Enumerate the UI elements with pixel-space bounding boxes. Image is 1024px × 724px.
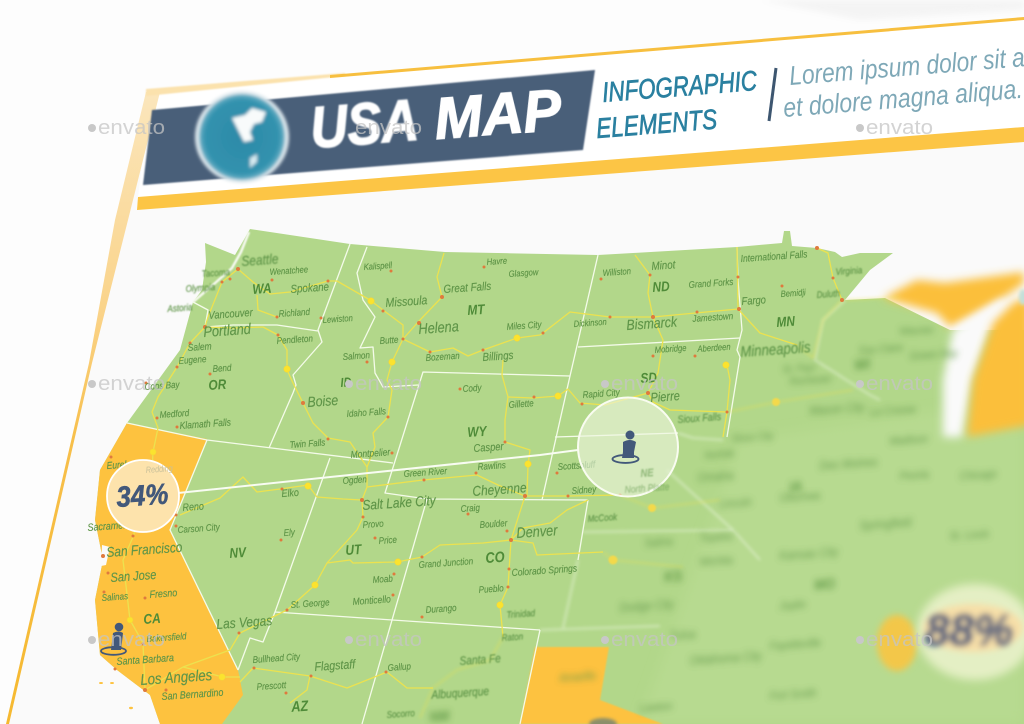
- city labels sharp: Pendleton: [276, 333, 313, 346]
- state abbreviations: ND: [652, 278, 671, 295]
- city labels sharp: Bemidji: [780, 287, 807, 299]
- city labels sharp: Craig: [460, 502, 480, 514]
- city labels sharp: Jamestown: [691, 310, 734, 324]
- city labels sharp: Vancouver: [208, 307, 254, 322]
- header title panel: [143, 70, 595, 185]
- land: green states: [95, 229, 1024, 724]
- city labels sharp: Sidney: [571, 484, 597, 496]
- city labels sharp: Ogden: [342, 474, 367, 486]
- city labels slightly blurred: Raton: [501, 631, 524, 643]
- city labels sharp: Great Falls: [443, 280, 492, 296]
- city labels sharp: Fresno: [149, 587, 178, 601]
- header band background: [138, 18, 1024, 198]
- city labels far blur: Lawton: [639, 700, 673, 715]
- city labels sharp: San Francisco: [106, 539, 183, 560]
- city labels far blur: Kansas City: [779, 544, 840, 563]
- city labels sharp: Fargo: [741, 295, 767, 308]
- watermarks: envato: [98, 629, 165, 651]
- city labels sharp: Gallup: [387, 661, 411, 673]
- city labels slightly blurred: Trinidad: [506, 607, 536, 620]
- city labels slightly blurred: Minneapolis: [740, 339, 811, 361]
- lens inner labels: [624, 467, 670, 495]
- header description: [782, 42, 1024, 123]
- lake michigan: [943, 300, 1013, 437]
- state abbreviations blurred: KS: [664, 567, 683, 585]
- upper right shade: [760, 0, 1024, 20]
- page left border: [6, 92, 160, 724]
- city labels far blur: Omaha: [697, 468, 734, 485]
- city labels sharp: Flagstaff: [314, 657, 357, 674]
- lake huron: [1019, 289, 1024, 305]
- city labels sharp: Minot: [651, 259, 677, 273]
- city labels far blur: Amarillo: [558, 670, 597, 685]
- city labels sharp: Las Vegas: [216, 612, 273, 632]
- pointer line: 34% to person marker: [178, 450, 578, 493]
- state: blurred south blob: [589, 718, 617, 724]
- watermarks: envato: [866, 629, 933, 651]
- state abbreviations: [143, 278, 796, 715]
- state abbreviations blurred: [429, 355, 872, 724]
- city labels sharp: Montpelier: [350, 447, 391, 460]
- state abbreviations: WA: [252, 280, 272, 297]
- state abbreviations: NV: [229, 544, 248, 561]
- city labels sharp: San Bernardino: [161, 687, 224, 703]
- city labels sharp: Eugene: [178, 353, 207, 366]
- city labels far blur: Springfield: [859, 514, 913, 533]
- city labels sharp: Butte: [379, 334, 399, 346]
- city labels sharp: Monticello: [352, 594, 391, 607]
- state abbreviations: OR: [208, 376, 227, 393]
- city labels sharp: Reno: [182, 501, 205, 514]
- city labels sharp: Mobridge: [654, 342, 687, 355]
- callout: person circle: [578, 398, 678, 496]
- city labels sharp: Casper: [473, 441, 505, 455]
- city labels sharp: Sacramento: [87, 519, 136, 534]
- city labels slightly blurred: Virginia: [835, 265, 863, 277]
- city labels sharp: Carson City: [177, 521, 221, 535]
- icon: globe: [195, 91, 289, 183]
- state: Michigan upper: [883, 272, 1024, 327]
- city labels sharp: Bakersfield: [146, 631, 188, 644]
- city labels sharp: Billings: [482, 349, 514, 364]
- city labels sharp: Twin Falls: [289, 437, 326, 450]
- watermarks: envato: [98, 373, 165, 395]
- city labels far blur: Dodge City: [619, 596, 675, 615]
- city labels slightly blurred: Santa Fe: [459, 652, 501, 668]
- california islands: [99, 682, 133, 709]
- city labels sharp: Grand Forks: [688, 276, 734, 290]
- subtitle: infographic elements: INFOGRAPHIC: [601, 65, 759, 108]
- city labels far blur: Joplin: [778, 598, 806, 613]
- city labels sharp: Bullhead City: [252, 651, 301, 665]
- state: California: [95, 423, 243, 724]
- state borders: [127, 244, 742, 724]
- city labels sharp: San Jose: [110, 567, 157, 585]
- title: USA MAP: [308, 77, 564, 161]
- city labels sharp: [87, 249, 808, 703]
- city labels slightly blurred: Tacoma: [201, 266, 230, 279]
- callout: 88 percent blurred: [923, 604, 1023, 655]
- state: Arkansas blurred: [877, 615, 917, 671]
- title: USA MAP: MAP: [432, 77, 564, 152]
- city labels sharp: Salinas: [101, 591, 129, 603]
- city labels sharp: Medford: [159, 407, 190, 420]
- watermarks: [88, 117, 933, 651]
- city markers: [101, 246, 844, 694]
- city labels slightly blurred: Albuquerque: [430, 685, 489, 702]
- lens inner labels: North Platte: [624, 481, 670, 495]
- state abbreviations: WY: [467, 423, 488, 440]
- city labels sharp: Green River: [403, 465, 448, 479]
- city labels far blur: Green Bay: [909, 347, 960, 363]
- state borders blurred east: [540, 300, 880, 630]
- city labels far blur: St. Louis: [949, 528, 990, 543]
- city labels slightly blurred: [166, 251, 863, 720]
- city labels sharp: Cheyenne: [472, 479, 527, 499]
- callout value: 34%: [115, 478, 169, 514]
- city labels far blur: Madison: [889, 433, 928, 448]
- city labels far blur: Tulsa: [669, 626, 696, 643]
- city labels sharp: Ely: [283, 527, 296, 538]
- city labels far blur: Wichita: [699, 554, 733, 569]
- watermarks: envato: [355, 117, 422, 139]
- highway shields: [127, 298, 729, 680]
- city labels slightly blurred: Olympia: [185, 281, 216, 294]
- city labels sharp: Los Angeles: [140, 667, 213, 689]
- city labels far blur: Des Moines: [819, 454, 878, 473]
- state abbreviations blurred: IA: [789, 477, 803, 495]
- state abbreviations: CO: [485, 548, 505, 566]
- navy banner: [143, 70, 595, 185]
- city labels far blur: Topeka: [699, 530, 733, 545]
- icon: person marker: [612, 430, 638, 463]
- city labels sharp: Santa Barbara: [116, 652, 175, 668]
- city labels sharp: Pierre: [650, 388, 681, 405]
- faded label: Redding: Redding: [145, 463, 173, 475]
- puget sound and columbia river: [193, 232, 249, 302]
- city labels sharp: Missoula: [385, 293, 428, 310]
- city labels far blur: Mason City: [809, 399, 866, 418]
- header bottom stripe: [137, 127, 1024, 210]
- highways blurred east: [420, 297, 900, 718]
- city labels sharp: Pueblo: [478, 583, 504, 595]
- state: Texas: [520, 647, 663, 724]
- city labels sharp: St. George: [290, 597, 330, 610]
- city labels sharp: Durango: [425, 602, 457, 615]
- city labels sharp: Gillette: [508, 398, 534, 410]
- city labels sharp: Wenatchee: [269, 264, 309, 277]
- city labels sharp: Idaho Falls: [346, 406, 387, 419]
- watermarks: envato: [98, 117, 165, 139]
- callout halo blurred: [917, 584, 1024, 680]
- map: USA land: [95, 229, 1024, 724]
- city labels sharp: Prescott: [256, 679, 287, 692]
- city labels sharp: Colorado Springs: [511, 563, 578, 578]
- city labels sharp: Denver: [516, 521, 559, 541]
- city labels far blur: Eau Claire: [859, 342, 904, 357]
- city labels far blur: Chicago: [959, 468, 997, 483]
- city labels sharp: Rapid City: [582, 387, 621, 400]
- city labels far blur: [558, 324, 997, 715]
- city labels sharp: Provo: [362, 518, 384, 530]
- subtitle: infographic elements: [595, 65, 759, 144]
- lens inner labels: NE: [640, 467, 655, 480]
- state abbreviations: ID: [340, 374, 352, 390]
- watermarks: envato: [866, 117, 933, 139]
- city labels sharp: Bismarck: [626, 313, 679, 333]
- city labels sharp: Kalispell: [363, 259, 393, 272]
- city labels far blur: Fort Smith: [769, 687, 817, 703]
- city labels sharp: Lewiston: [322, 312, 353, 325]
- state: Michigan lower: [967, 296, 1024, 437]
- watermarks: envato: [611, 629, 678, 651]
- city labels far blur: Lincoln: [719, 496, 752, 511]
- city labels sharp: Dickinson: [573, 316, 607, 329]
- city labels far blur: Rochester: [789, 373, 833, 388]
- watermarks: envato: [355, 373, 422, 395]
- watermarks: envato: [355, 629, 422, 651]
- city labels sharp: Price: [378, 534, 397, 546]
- callout value: 88%: [925, 606, 1013, 655]
- city labels sharp: Elko: [281, 487, 300, 500]
- city labels sharp: Boise: [307, 392, 339, 410]
- city labels sharp: Portland: [203, 320, 252, 340]
- callout circle: [107, 460, 179, 532]
- callout lens: [578, 398, 678, 496]
- city labels far blur: Ottumwa: [779, 489, 821, 505]
- city labels sharp: Salt Lake City: [362, 492, 438, 513]
- state abbreviations: MT: [467, 301, 486, 318]
- state abbreviations: CA: [143, 610, 161, 627]
- city labels sharp: Eureka: [106, 459, 134, 471]
- city labels sharp: Williston: [602, 265, 632, 278]
- state abbreviations: AZ: [290, 697, 309, 715]
- city labels far blur: Oklahoma City: [689, 648, 763, 668]
- city labels sharp: Helena: [418, 317, 460, 337]
- state abbreviations: UT: [345, 541, 363, 558]
- city labels sharp: Coos Bay: [144, 379, 180, 392]
- watermarks: envato: [611, 373, 678, 395]
- city labels sharp: Boulder: [479, 517, 509, 530]
- city labels sharp: Bozeman: [425, 350, 460, 363]
- city labels slightly blurred: Duluth: [816, 288, 840, 300]
- city labels sharp: Salmon: [342, 349, 370, 362]
- city labels sharp: Scottsbluff: [557, 459, 597, 472]
- city labels sharp: International Falls: [740, 249, 808, 264]
- city labels far blur: Norfolk: [704, 448, 735, 462]
- icon: person marker in California: [101, 623, 126, 655]
- city labels far blur: Salina: [644, 535, 673, 550]
- city labels far blur: Sioux City: [731, 430, 775, 445]
- city labels slightly blurred: Seattle: [241, 251, 279, 269]
- city labels slightly blurred: McCook: [587, 511, 618, 524]
- city labels slightly blurred: Sioux Falls: [677, 411, 722, 426]
- state abbreviations: SD: [640, 369, 658, 386]
- city labels sharp: Aberdeen: [696, 341, 731, 354]
- city labels sharp: Richland: [278, 306, 311, 319]
- city labels slightly blurred: Astoria: [166, 302, 193, 314]
- city labels sharp: Havre: [486, 255, 508, 267]
- city labels sharp: Rawlins: [477, 459, 507, 472]
- state abbreviations blurred: WI: [854, 355, 872, 373]
- callout core: [923, 604, 1023, 652]
- city labels far blur: St. Paul: [782, 362, 816, 376]
- callout: 34 percent: [107, 460, 179, 532]
- header top rule: [330, 17, 1024, 78]
- city labels sharp: Grand Junction: [418, 556, 474, 570]
- city labels sharp: Glasgow: [508, 266, 540, 279]
- city labels sharp: Cody: [462, 382, 482, 394]
- title: USA MAP: USA: [308, 88, 421, 161]
- city labels sharp: Moab: [372, 573, 393, 585]
- header top rule faded: [146, 73, 345, 96]
- highway shields blurred: [608, 398, 780, 564]
- san francisco bay: [101, 545, 110, 566]
- city labels far blur: Fayetteville: [769, 637, 821, 653]
- city labels sharp: Klamath Falls: [179, 417, 232, 431]
- watermarks: envato: [866, 373, 933, 395]
- header divider: [769, 68, 776, 121]
- city labels sharp: Bend: [212, 362, 233, 374]
- city labels sharp: Spokane: [290, 281, 330, 296]
- highways: [123, 247, 842, 703]
- city labels sharp: Salem: [187, 341, 212, 353]
- state abbreviations blurred: MO: [814, 575, 836, 593]
- city labels far blur: La Crosse: [869, 403, 916, 419]
- city labels sharp: Miles City: [506, 319, 542, 332]
- city labels far blur: Wausau: [899, 324, 934, 338]
- city labels far blur: Peoria: [899, 468, 929, 483]
- state abbreviations: MN: [776, 313, 796, 330]
- subtitle: infographic elements: ELEMENTS: [595, 104, 718, 144]
- land: lighter blurred east: [640, 400, 1024, 724]
- city labels slightly blurred: Socorro: [386, 707, 415, 720]
